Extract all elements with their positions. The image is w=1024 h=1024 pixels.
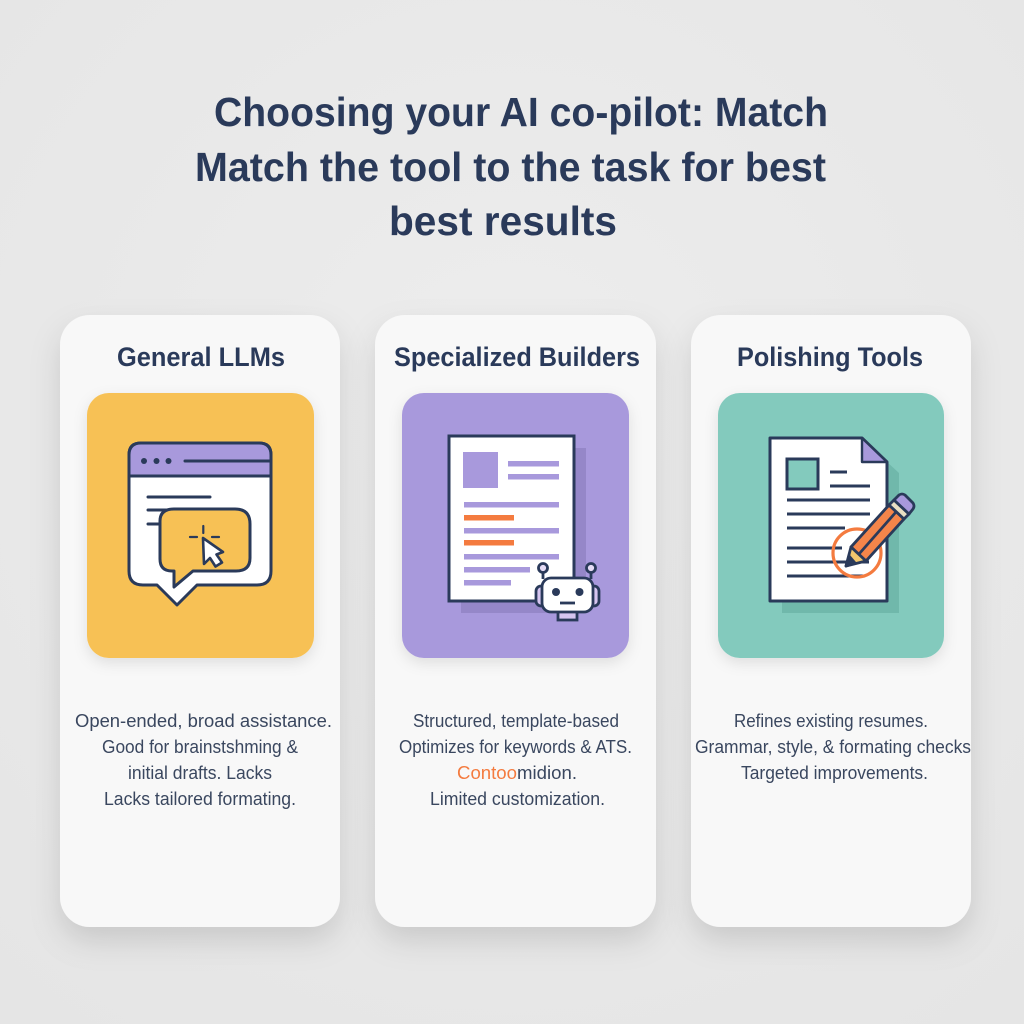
heading: Specialized Builders: Specialized Builders: [394, 342, 640, 372]
description: Specialized Builders: [399, 711, 632, 809]
icon: resume with robot: [449, 436, 599, 620]
description: Polishing Tools: [695, 711, 971, 783]
icon: document with pencil: [770, 438, 914, 613]
icon: robot: [536, 564, 599, 620]
description: Polishing Tools: Refines existing resumes.: [734, 711, 928, 731]
heading: General LLMs: General LLMs: [117, 342, 285, 372]
title: Choosing your AI co-pilot: Match: [214, 89, 828, 135]
description: General LLMs: initial drafts. Lacks: [128, 763, 272, 783]
panel: Polishing Tools: [691, 315, 971, 927]
icon tile: teal: [718, 393, 944, 658]
description: Polishing Tools: Targeted improvements.: [741, 763, 928, 783]
description: General LLMs: Open-ended, broad assistance.: [75, 711, 332, 731]
description: General LLMs: Lacks tailored formating.: [104, 789, 296, 809]
description: General LLMs: [75, 711, 332, 809]
icon: browser window with chat bubble and cursor: [129, 443, 271, 605]
title: best results: [389, 198, 617, 244]
description: Polishing Tools: Grammar, style, & formating checks: [695, 737, 971, 757]
icon tile: purple: [402, 393, 629, 658]
title: Match the tool to the task for best: [195, 144, 826, 190]
heading: Polishing Tools: Polishing Tools: [737, 342, 923, 372]
description: Specialized Builders: Optimizes for keywords & ATS.: [399, 737, 632, 757]
title: [195, 89, 828, 244]
icon tile: amber: [87, 393, 314, 658]
description: Specialized Builders: Structured, template-based: [413, 711, 619, 731]
description: Specialized Builders: Limited customization.: [430, 789, 605, 809]
panel: Specialized Builders: [375, 315, 656, 927]
icon: pencil: [846, 494, 914, 566]
panel: General LLMs: [60, 315, 340, 927]
description: General LLMs: Good for brainstshming &: [102, 737, 298, 757]
description: Specialized Builders: Contoomidion.: [457, 763, 577, 783]
